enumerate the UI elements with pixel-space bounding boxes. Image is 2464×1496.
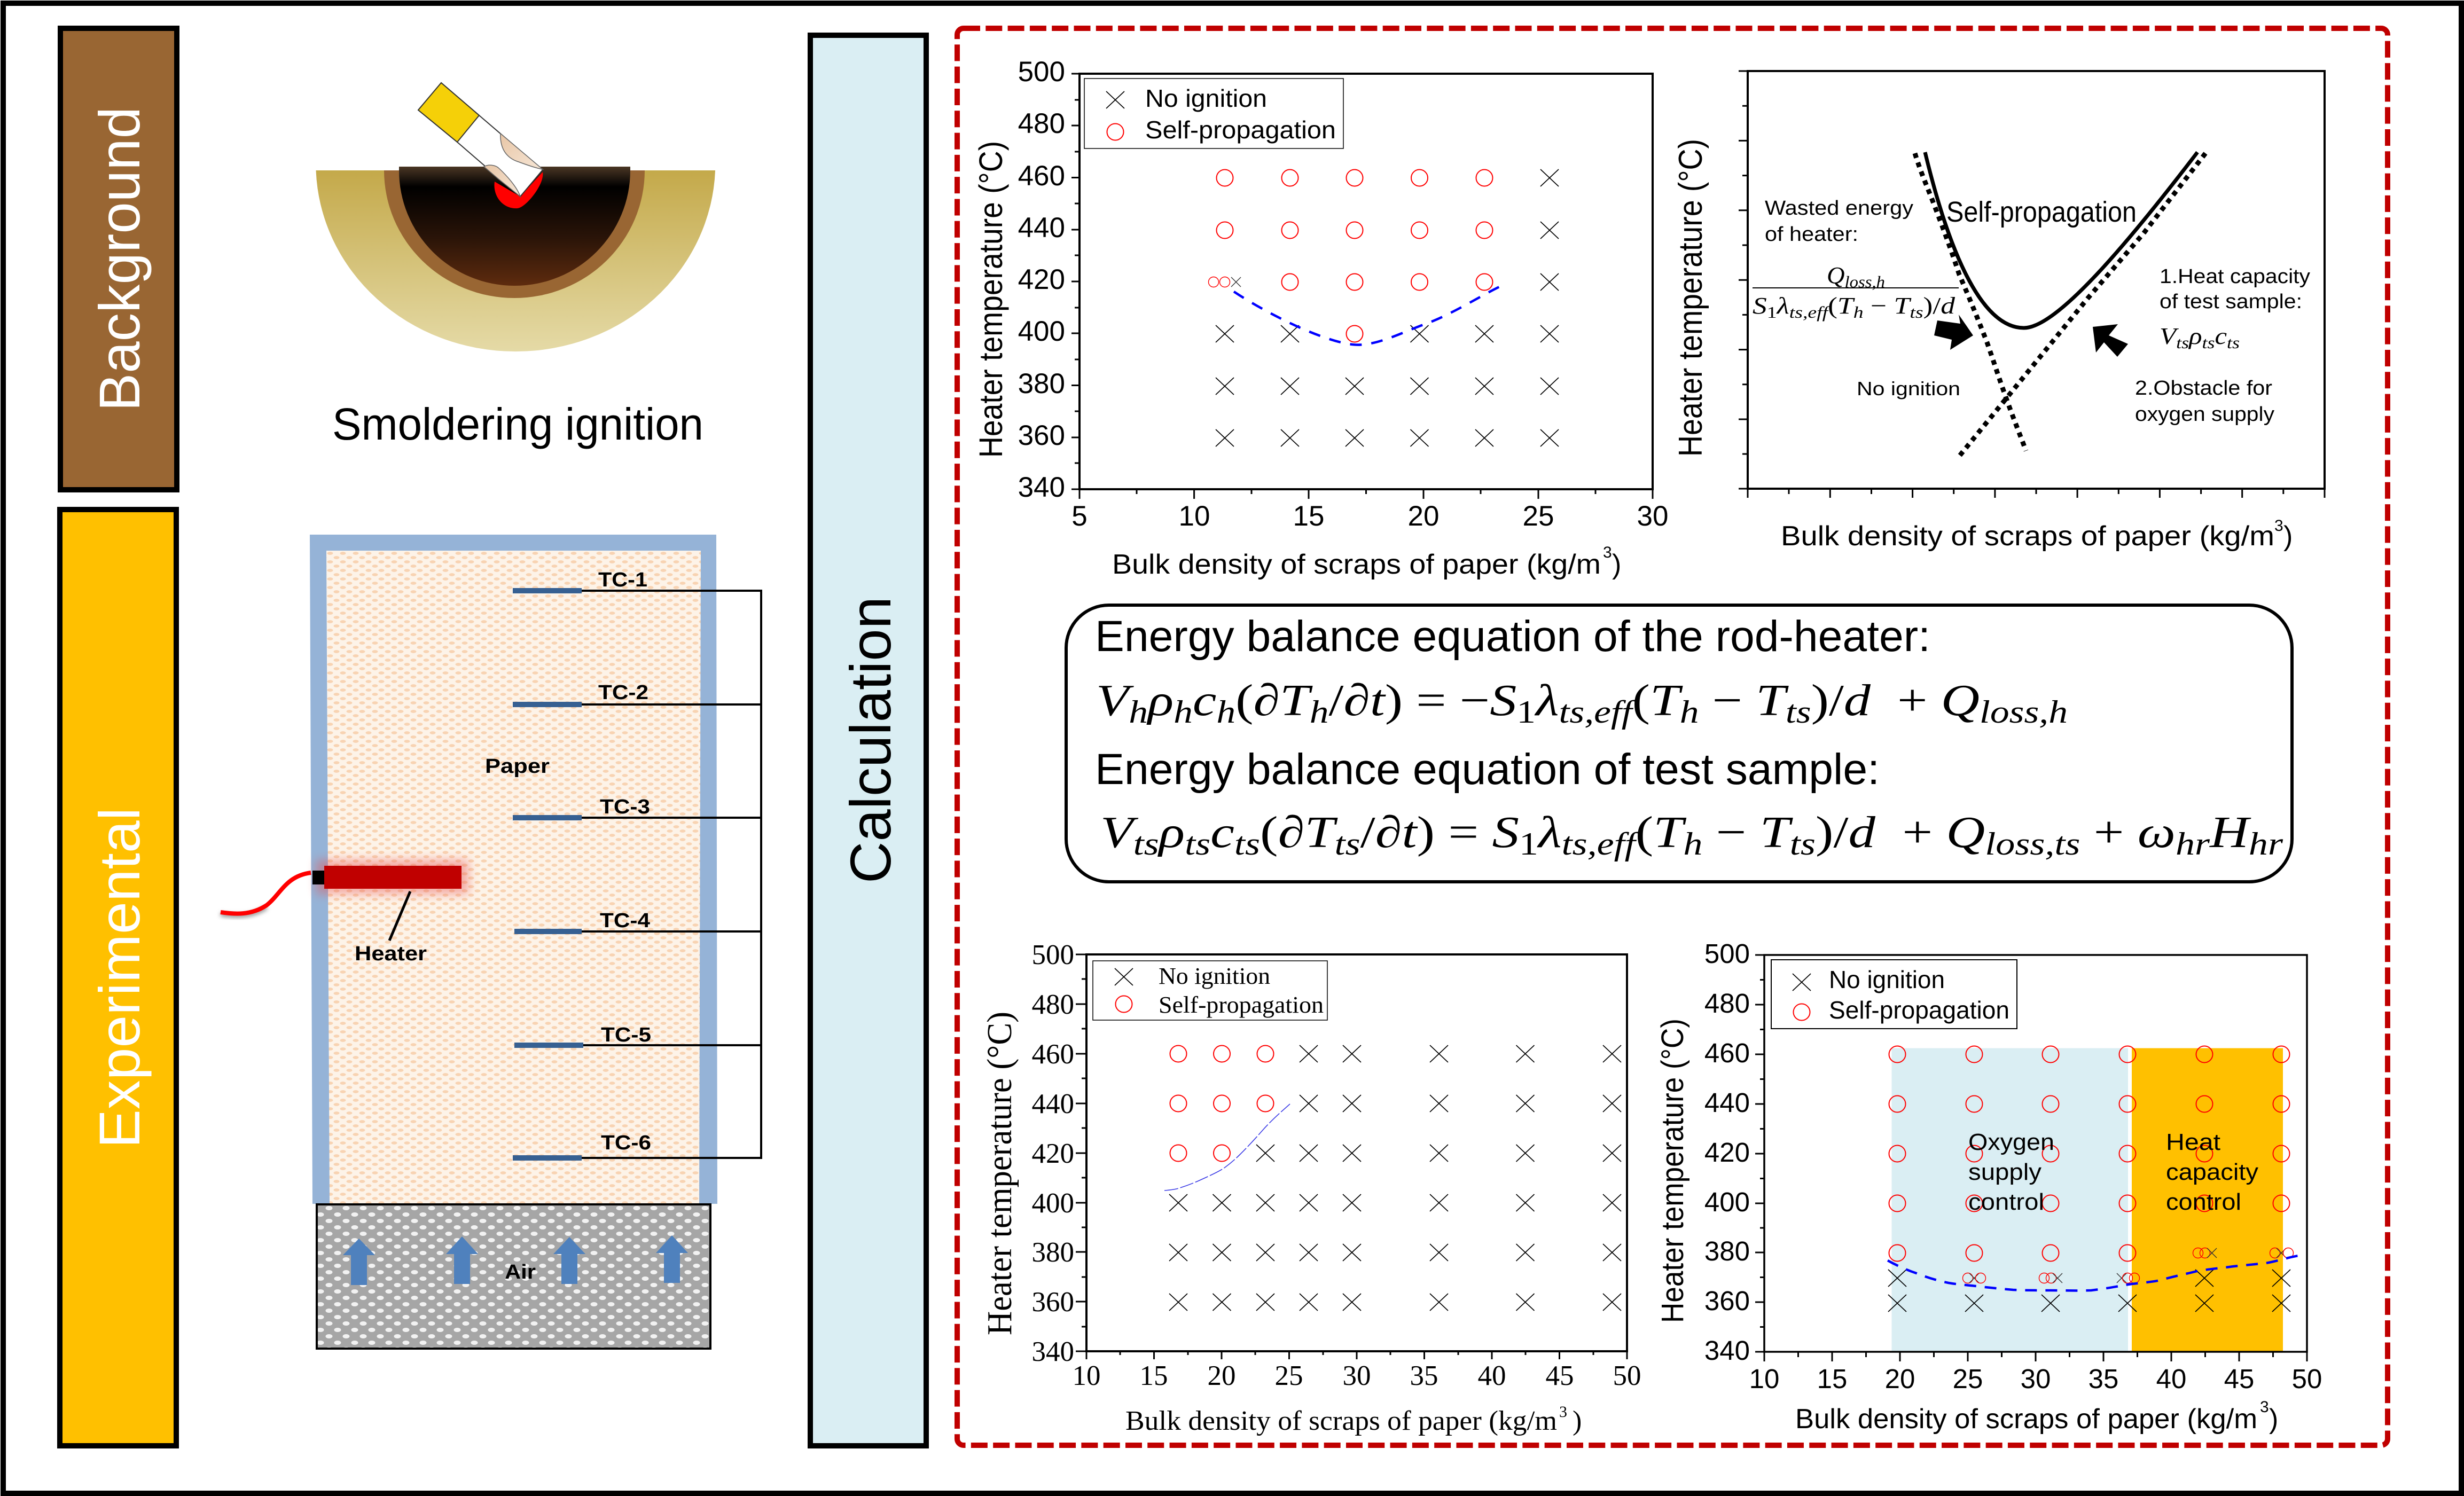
annotation: wasted energy: )/	[1923, 293, 1941, 319]
equation: test sample: ∂T	[1278, 808, 1325, 857]
annotation: heat capacity: of test sample:	[2160, 291, 2302, 313]
region label: oxygen supply control: Oxygen	[1968, 1129, 2054, 1155]
y tick labels: 460	[1704, 1038, 1750, 1068]
equation: test sample: loss,ts	[1985, 826, 2080, 861]
y tick labels: 420	[1704, 1137, 1750, 1168]
equation: rod-heater: V	[1096, 676, 1123, 725]
y tick labels	[1032, 939, 1074, 1367]
annotation: wasted energy: (	[1828, 293, 1837, 319]
container walls	[310, 535, 717, 1204]
x tick labels: 40	[1477, 1360, 1506, 1391]
equation: test sample: (	[1260, 808, 1278, 857]
thermocouple probes	[513, 588, 583, 1161]
y tick labels: 340	[1018, 472, 1065, 503]
x tick labels	[1073, 1360, 1641, 1391]
label: Paper: Paper	[485, 755, 550, 778]
annotation: oxygen supply: 2.Obstacle for	[2135, 377, 2272, 400]
equation: rod-heater: ∂T	[1254, 676, 1301, 725]
equation: test sample: −	[1702, 808, 1760, 857]
equation: rod-heater: ts	[1786, 694, 1811, 730]
annotation: heat capacity: 1.Heat capacity	[2160, 265, 2310, 288]
y tick labels: 340	[1704, 1335, 1750, 1366]
equation: rod-heater: ∂t) = − S	[1343, 676, 1512, 725]
x tick labels	[1071, 500, 1668, 532]
x axis title: )	[1612, 549, 1621, 580]
y tick labels: 440	[1018, 212, 1065, 244]
legend: Self-propagation	[1829, 996, 2009, 1024]
annotation: wasted energy: T	[1837, 293, 1850, 319]
y tick labels: 460	[1032, 1039, 1074, 1070]
heading: Experimental: Experimental	[87, 808, 152, 1148]
annotation: heat capacity: ts	[2176, 333, 2189, 352]
x axis title: )	[2283, 521, 2293, 552]
region label: oxygen supply control: supply	[1968, 1159, 2041, 1185]
thermocouple labels: TC-1	[598, 569, 647, 591]
x tick labels: 15	[1293, 500, 1324, 532]
x tick labels: 25	[1523, 500, 1554, 532]
equation: test sample: ts	[1790, 826, 1816, 861]
equation: test sample: λ	[1536, 808, 1562, 857]
annotation: wasted energy: −	[1864, 293, 1894, 319]
heading: Calculation: Calculation	[838, 597, 903, 883]
x tick labels	[1749, 1364, 2322, 1394]
thermocouple wiring	[581, 590, 762, 1159]
equation: test sample: h	[1683, 826, 1702, 861]
x tick labels: 20	[1207, 1360, 1236, 1391]
x tick labels: 35	[1410, 1360, 1438, 1391]
y tick labels: 380	[1032, 1237, 1074, 1268]
annotation: heat capacity: ρ	[2188, 323, 2202, 349]
y axis title: Heater temperature (°C)	[1655, 1019, 1690, 1323]
paper sample	[323, 547, 702, 1204]
x axis title: 3	[2260, 1398, 2269, 1416]
annotation: heat capacity: ts	[2227, 333, 2240, 352]
thermocouple labels: TC-5	[601, 1024, 651, 1046]
x tick labels: 35	[2088, 1364, 2118, 1394]
legend	[1771, 960, 2017, 1029]
annotation: wasted energy: of heater:	[1765, 223, 1858, 246]
x tick labels: 20	[1408, 500, 1439, 532]
x tick labels: 50	[1613, 1360, 1641, 1391]
region: heat capacity control	[2132, 1048, 2283, 1351]
annotation: wasted energy: Wasted energy	[1765, 197, 1913, 220]
equation: test sample: ∂t) = S	[1375, 808, 1514, 857]
equation: rod-heater: 1	[1516, 694, 1536, 730]
annotation: heat capacity: ts	[2202, 333, 2215, 352]
label: Heater: Heater	[355, 943, 427, 965]
y tick labels: 480	[1704, 988, 1750, 1019]
label: Air: Air	[505, 1261, 536, 1283]
equation: test sample: +	[2080, 808, 2138, 857]
y tick labels	[1704, 938, 1750, 1366]
data points	[1888, 1046, 2294, 1312]
region label: self-propagation: Self-propagation	[1946, 196, 2137, 228]
thermocouple labels: TC-4	[600, 910, 650, 932]
diagram: experimental apparatus	[221, 535, 762, 1349]
equation: test sample: H	[2209, 808, 2251, 857]
annotation: wasted energy: λ	[1775, 293, 1789, 319]
region label: oxygen supply control: control	[1968, 1189, 2044, 1215]
heading: Background: Background	[87, 107, 152, 411]
y tick labels: 500	[1704, 938, 1750, 969]
region label: oxygen supply control	[1968, 1129, 2054, 1215]
arrow: heater side	[1934, 315, 1973, 350]
x tick labels: 15	[1140, 1360, 1168, 1391]
equation: rod-heater: (	[1235, 676, 1254, 725]
thermocouple labels: TC-3	[600, 796, 650, 818]
annotation: wasted energy: T	[1894, 293, 1907, 319]
region label: heat capacity control: capacity	[2166, 1159, 2258, 1185]
y axis title: Heater temperature (°C)	[1672, 139, 1709, 457]
x tick labels: 10	[1073, 1360, 1100, 1391]
illustration: smoldering cigarette in paper	[316, 83, 715, 351]
annotation: oxygen supply	[2135, 377, 2274, 426]
y tick labels: 440	[1032, 1088, 1074, 1119]
equation: test sample: ts	[1335, 826, 1360, 861]
x axis title: Bulk density of scraps of paper (kg/m	[1125, 1406, 1557, 1436]
y tick labels: 480	[1032, 989, 1074, 1020]
x axis title: Bulk density of scraps of paper (kg/m	[1795, 1404, 2257, 1435]
rod heater	[221, 860, 468, 941]
annotation: wasted energy: d	[1941, 293, 1952, 319]
thermocouple labels: TC-6	[601, 1132, 651, 1154]
equation: rod-heater: h	[1174, 694, 1193, 730]
equation: test sample: ω	[2138, 808, 2169, 857]
region: oxygen supply control	[1892, 1048, 2128, 1351]
equation: test sample: ts	[1234, 826, 1260, 861]
chart: control regimes	[1655, 938, 2322, 1435]
equation: test sample: ts	[1185, 826, 1210, 861]
y axis title: Heater temperature (°C)	[980, 1012, 1019, 1335]
y tick labels: 380	[1704, 1236, 1750, 1266]
y tick labels: 400	[1704, 1187, 1750, 1217]
x axis title: Bulk density of scraps of paper (kg/m	[1781, 521, 2274, 552]
annotation: wasted energy: loss,h	[1845, 272, 1885, 291]
x tick labels: 25	[1953, 1364, 1983, 1394]
x tick labels: 10	[1179, 500, 1210, 532]
equation: rod-heater: T	[1756, 676, 1781, 725]
thermocouple labels: TC-2	[598, 682, 648, 704]
y tick labels: 480	[1018, 108, 1065, 139]
chart: bulk density 5-30	[973, 56, 1668, 580]
equation: test sample: hr	[2249, 826, 2283, 861]
y tick labels: 400	[1018, 316, 1065, 347]
y tick labels: 360	[1018, 420, 1065, 451]
dotted limit: heater energy	[1915, 153, 2026, 451]
legend	[1084, 79, 1343, 148]
equation: rod-heater: h	[1680, 694, 1699, 730]
air chamber	[317, 1204, 710, 1349]
solid boundary curve	[1925, 152, 2197, 328]
y tick labels: 440	[1704, 1087, 1750, 1118]
equation: rod-heater: ts,eff	[1559, 694, 1637, 730]
annotation: wasted energy	[1753, 197, 1959, 322]
equation: rod-heater: h	[1129, 694, 1148, 730]
y tick labels: 500	[1018, 56, 1065, 88]
data points	[1208, 169, 1559, 447]
x tick labels: 30	[2021, 1364, 2051, 1394]
y axis title: Heater temperature (°C)	[973, 141, 1009, 458]
chart: conceptual ignition boundary	[1672, 71, 2325, 552]
equation: rod-heater: T	[1650, 676, 1675, 725]
x tick labels: 20	[1885, 1364, 1915, 1394]
panel: Calculation sidebar	[810, 35, 926, 1446]
annotation: oxygen supply: oxygen supply	[2135, 403, 2274, 426]
region label: no ignition: No ignition	[1857, 378, 1960, 400]
equation: test sample: /	[1360, 808, 1375, 857]
equation: rod-heater: h	[1216, 694, 1235, 730]
x tick labels: 30	[1637, 500, 1668, 532]
panel: red dashed calculation frame	[957, 28, 2388, 1445]
equation: test sample: V	[1100, 808, 1128, 857]
region label: heat capacity control: control	[2166, 1189, 2241, 1215]
arrow: sample side	[2093, 324, 2128, 357]
y tick labels: 340	[1032, 1336, 1074, 1367]
y tick labels: 380	[1018, 368, 1065, 400]
legend	[1093, 961, 1327, 1020]
annotation: wasted energy: S	[1753, 293, 1764, 319]
panel: energy balance equations	[1066, 605, 2292, 882]
x axis title: 3	[2274, 517, 2283, 535]
y tick labels: 420	[1018, 264, 1065, 295]
x axis title: 3	[1603, 544, 1612, 561]
equation: test sample: (	[1636, 808, 1653, 857]
boundary curve	[1888, 1255, 2303, 1290]
equation: test sample: d + Q	[1848, 808, 1978, 857]
y tick labels	[1018, 56, 1065, 503]
panel: Experimental sidebar	[60, 510, 176, 1446]
equation: rod-heater: λ	[1534, 676, 1559, 725]
y tick labels: 460	[1018, 160, 1065, 192]
equation: test sample: T	[1653, 808, 1678, 857]
x tick labels: 25	[1274, 1360, 1303, 1391]
boundary curve	[1234, 287, 1499, 345]
equation: rod-heater: loss,h	[1980, 694, 2068, 730]
equation: test sample: ts,eff	[1562, 826, 1640, 861]
heading: test sample equation: Energy balance equation of test sample:	[1095, 745, 1880, 794]
equation: rod-heater: ρ	[1146, 676, 1174, 725]
x tick labels: 45	[2224, 1364, 2254, 1394]
annotation: heat capacity	[2160, 265, 2310, 352]
y tick labels: 500	[1032, 939, 1074, 970]
x tick labels: 45	[1546, 1360, 1574, 1391]
y tick labels: 360	[1032, 1287, 1074, 1318]
equation: rod-heater: d + Q	[1844, 676, 1973, 725]
equation: test sample: ρ	[1157, 808, 1185, 857]
chart: bulk density 10-50 serif	[980, 939, 1641, 1436]
x tick labels: 5	[1071, 500, 1088, 532]
heading: rod-heater equation: Energy balance equation of the rod-heater:	[1095, 612, 1930, 661]
boundary curve	[1164, 1104, 1290, 1190]
x tick labels: 30	[1343, 1360, 1371, 1391]
air flow arrows	[343, 1235, 688, 1285]
panel: Background sidebar	[60, 28, 177, 490]
region label: heat capacity control	[2166, 1129, 2258, 1215]
annotation: wasted energy: Q	[1827, 262, 1844, 288]
y tick labels: 400	[1032, 1188, 1074, 1219]
data points	[1169, 1045, 1621, 1311]
equation: rod-heater: −	[1699, 676, 1756, 725]
annotation: wasted energy: ts	[1910, 303, 1923, 322]
y tick labels: 360	[1704, 1286, 1750, 1316]
equation: rod-heater: )/	[1811, 676, 1844, 725]
legend: No ignition	[1829, 966, 1945, 993]
equation: rod-heater: h	[1310, 694, 1329, 730]
x axis title: )	[2269, 1404, 2278, 1435]
equation: test sample: c	[1210, 808, 1234, 857]
equation: rod-heater: /	[1329, 676, 1344, 725]
x tick labels: 10	[1749, 1364, 1779, 1394]
thermocouple labels	[598, 569, 651, 1154]
annotation: heat capacity: V	[2160, 323, 2174, 349]
x axis title: Bulk density of scraps of paper (kg/m	[1112, 549, 1601, 580]
region label: heat capacity control: Heat	[2166, 1129, 2220, 1155]
equation: rod-heater: c	[1193, 676, 1216, 725]
x axis title: )	[1573, 1406, 1582, 1436]
x tick labels: 15	[1817, 1364, 1847, 1394]
legend: No ignition	[1159, 963, 1270, 989]
equation: test sample: hr	[2176, 826, 2210, 861]
annotation: wasted energy: h	[1853, 303, 1864, 322]
dotted limit: heat capacity and oxygen	[1957, 153, 2205, 459]
annotation: heat capacity: c	[2215, 323, 2227, 349]
annotation: wasted energy: 1	[1767, 303, 1777, 322]
x tick labels: 50	[2292, 1364, 2322, 1394]
y tick labels: 420	[1032, 1138, 1074, 1169]
legend: Self-propagation	[1159, 992, 1324, 1018]
equation: test sample: T	[1760, 808, 1785, 857]
equation: test sample: 1	[1519, 826, 1538, 861]
equation: rod-heater: (	[1632, 676, 1650, 725]
caption: Smoldering ignition: Smoldering ignition	[332, 399, 703, 449]
legend: Self-propagation	[1145, 116, 1336, 144]
legend: No ignition	[1145, 84, 1267, 112]
annotation: wasted energy: ts,eff	[1789, 303, 1831, 322]
equation: test sample: ts	[1133, 826, 1159, 861]
equation: test sample: )/	[1816, 808, 1849, 857]
x tick labels: 40	[2156, 1364, 2186, 1394]
x axis title: 3	[1559, 1403, 1567, 1421]
